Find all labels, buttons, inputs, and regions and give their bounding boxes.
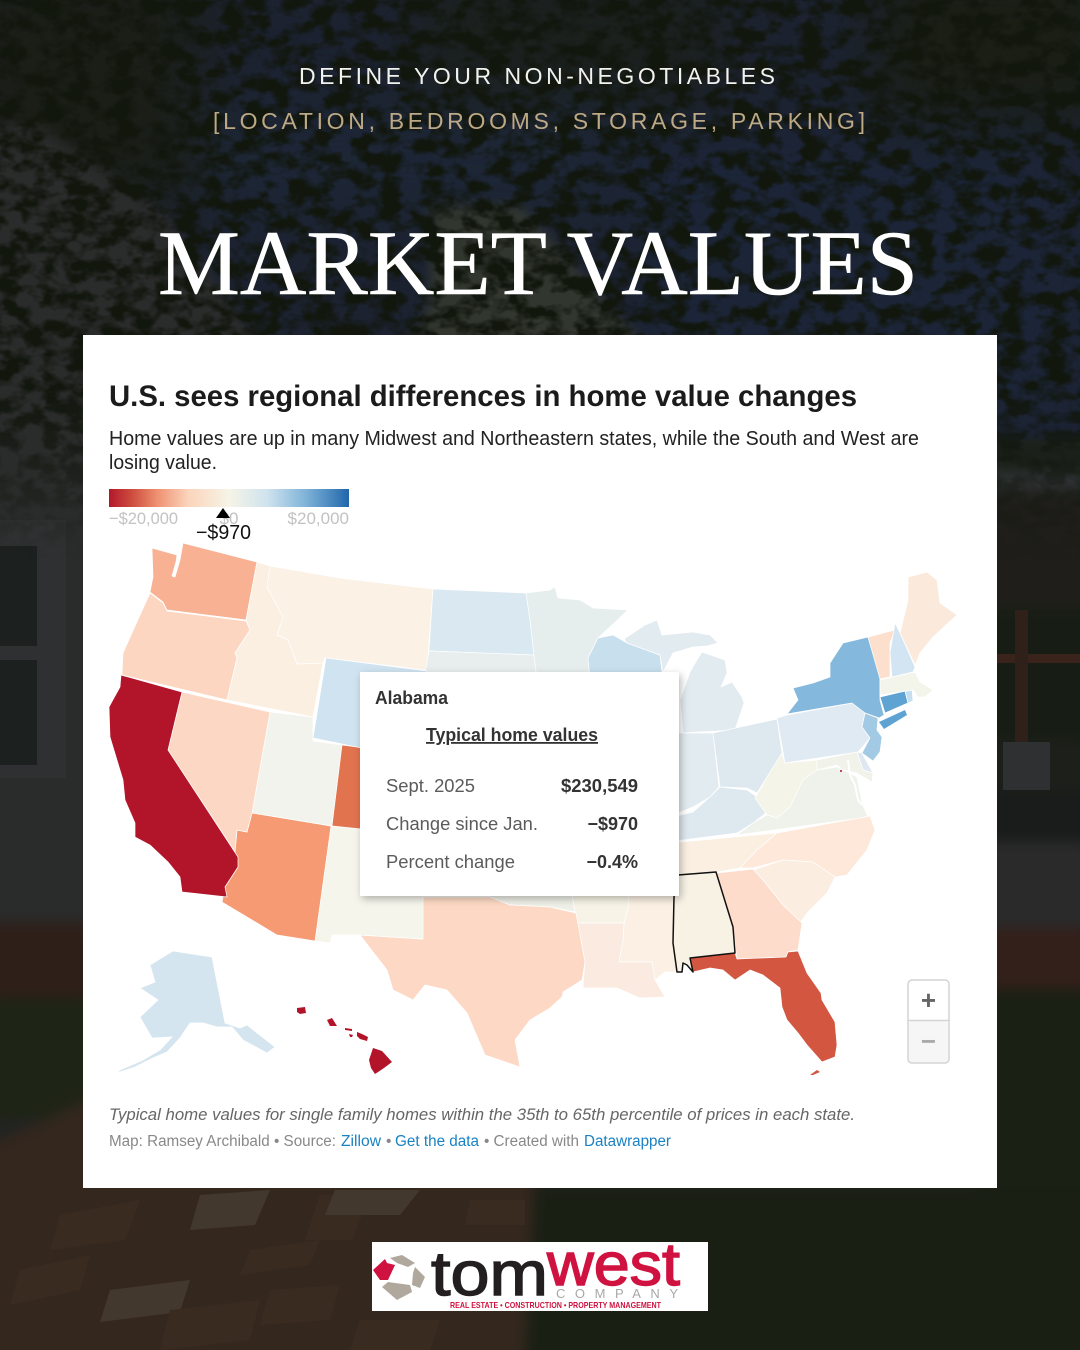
tooltip: Alabama details: −0.4% [586,852,638,872]
colour legend [109,489,349,544]
Delaware [857,752,873,773]
chart title: U.S. sees regional differences in home value changes [109,380,857,413]
zoom controls: − [921,1026,936,1056]
Utah [252,712,342,826]
Florida [690,951,837,1062]
Indiana and Illinois [660,733,719,820]
Ohio [713,719,782,793]
Minnesota [526,587,628,680]
choropleth map of U.S. states [109,543,957,1075]
colour legend: $20,000 [288,509,349,528]
Louisiana [577,923,665,998]
source line: • [386,1133,391,1150]
tooltip: Alabama details: Percent change [386,852,515,872]
South Carolina [753,860,835,923]
Washington DC [840,770,842,772]
Wyoming [313,658,427,760]
Michigan upper peninsula [624,620,718,672]
Massachusetts [880,672,933,697]
tooltip: Alabama details: Alabama [375,688,449,708]
source line: • Created with [484,1133,579,1150]
heading: define your non-negotiables: DEFINE YOUR NON-NEGOTIABLES [299,63,775,89]
New Hampshire [890,623,915,677]
South Dakota [420,651,537,700]
logo: Tom West Company: tom [431,1240,548,1309]
Montana [267,566,433,670]
Arizona [222,813,331,941]
Alaska [117,951,275,1073]
source line: Datawrapper [584,1133,671,1150]
source line: Get the data [395,1133,479,1150]
Michigan lower peninsula [680,652,744,733]
New Mexico [315,826,423,943]
chart description: losing value. [109,452,217,474]
Idaho [227,562,323,717]
window on left wall [0,520,66,778]
Oklahoma [423,885,575,912]
West Virginia [755,753,817,818]
Hawaii [297,1007,392,1074]
source line: Zillow [341,1133,382,1150]
chart description [109,428,919,474]
New York [787,637,884,718]
tooltip: Alabama details: Sept. 2025 [386,776,475,796]
zoom controls: + [921,985,936,1015]
Florida keys [810,1070,820,1075]
Washington [150,543,257,620]
colour legend: −$970 [196,522,251,544]
Maine [900,572,957,665]
logo: Tom West Company: REAL ESTATE • CONSTRUCTION • PROPERTY MANAGEMENT [450,1300,662,1310]
tooltip: Alabama details: Typical home values [426,725,598,745]
title: market values: MARKET VALUES [158,212,918,314]
Wisconsin [588,635,663,680]
North Carolina [740,816,875,877]
tooltip: Alabama details: $230,549 [561,776,638,796]
Tennessee [660,833,777,877]
New Jersey [862,713,882,761]
zoom controls [908,980,949,1063]
Oregon [122,593,250,700]
panel: map card [83,335,997,1188]
tooltip: Alabama details: Change since Jan. [386,814,538,834]
Virginia [737,767,868,835]
icon: house arrows [373,1255,425,1300]
Pennsylvania [777,703,870,763]
source line [109,1133,671,1150]
Colorado [332,745,420,835]
colour legend: −$20,000 [109,509,178,528]
porch post and planter on right [990,610,1080,790]
footnote: Typical home values for single family homes within the 35th to 65th percentile of prices in each state. [109,1105,855,1124]
North Dakota [429,589,534,655]
logo: Tom West Company [372,1231,708,1311]
colour legend: $0 [220,509,238,528]
Long Island [879,710,907,729]
tooltip: Alabama details [360,672,679,896]
Alabama, highlighted [673,872,735,972]
Chesapeake bay [848,760,862,805]
Kentucky [660,787,767,843]
subheading: list of non-negotiables: [LOCATION, BEDROOMS, STORAGE, PARKING] [213,108,865,134]
Mississippi [619,880,677,980]
California [109,675,238,897]
Vermont [868,630,895,679]
Arkansas [570,880,629,923]
tooltip: Alabama details: −$970 [587,814,638,834]
logo: Tom West Company: west [546,1231,680,1298]
chart description: Home values are up in many Midwest and Northeastern states, while the South and West are [109,428,919,450]
Nevada [168,692,270,852]
logo: Tom West Company: COMPANY [556,1286,678,1301]
source line: Map: Ramsey Archibald • Source: [109,1133,336,1150]
Georgia [717,869,802,959]
Rhode Island [905,689,913,703]
Connecticut [880,691,908,713]
Texas [360,897,585,1067]
Maryland [817,752,873,782]
